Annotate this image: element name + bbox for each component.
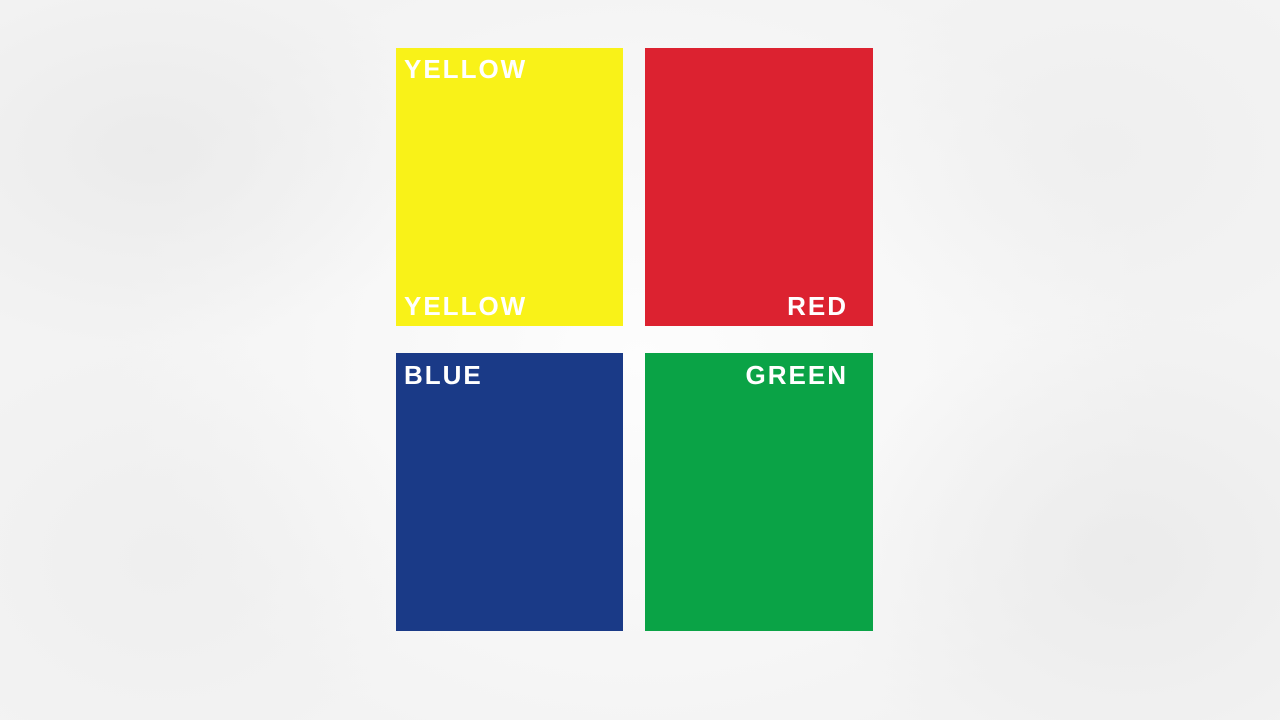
- panel: red: [645, 48, 873, 326]
- label: yellow bottom: YELLOW: [404, 291, 527, 321]
- label: green: GREEN: [746, 360, 848, 390]
- panel: blue: [396, 353, 623, 631]
- panel: green: [645, 353, 873, 631]
- label: blue: BLUE: [404, 360, 483, 390]
- label: red: RED: [787, 291, 848, 321]
- label: yellow top: YELLOW: [404, 54, 527, 84]
- panel: yellow: [396, 48, 623, 326]
